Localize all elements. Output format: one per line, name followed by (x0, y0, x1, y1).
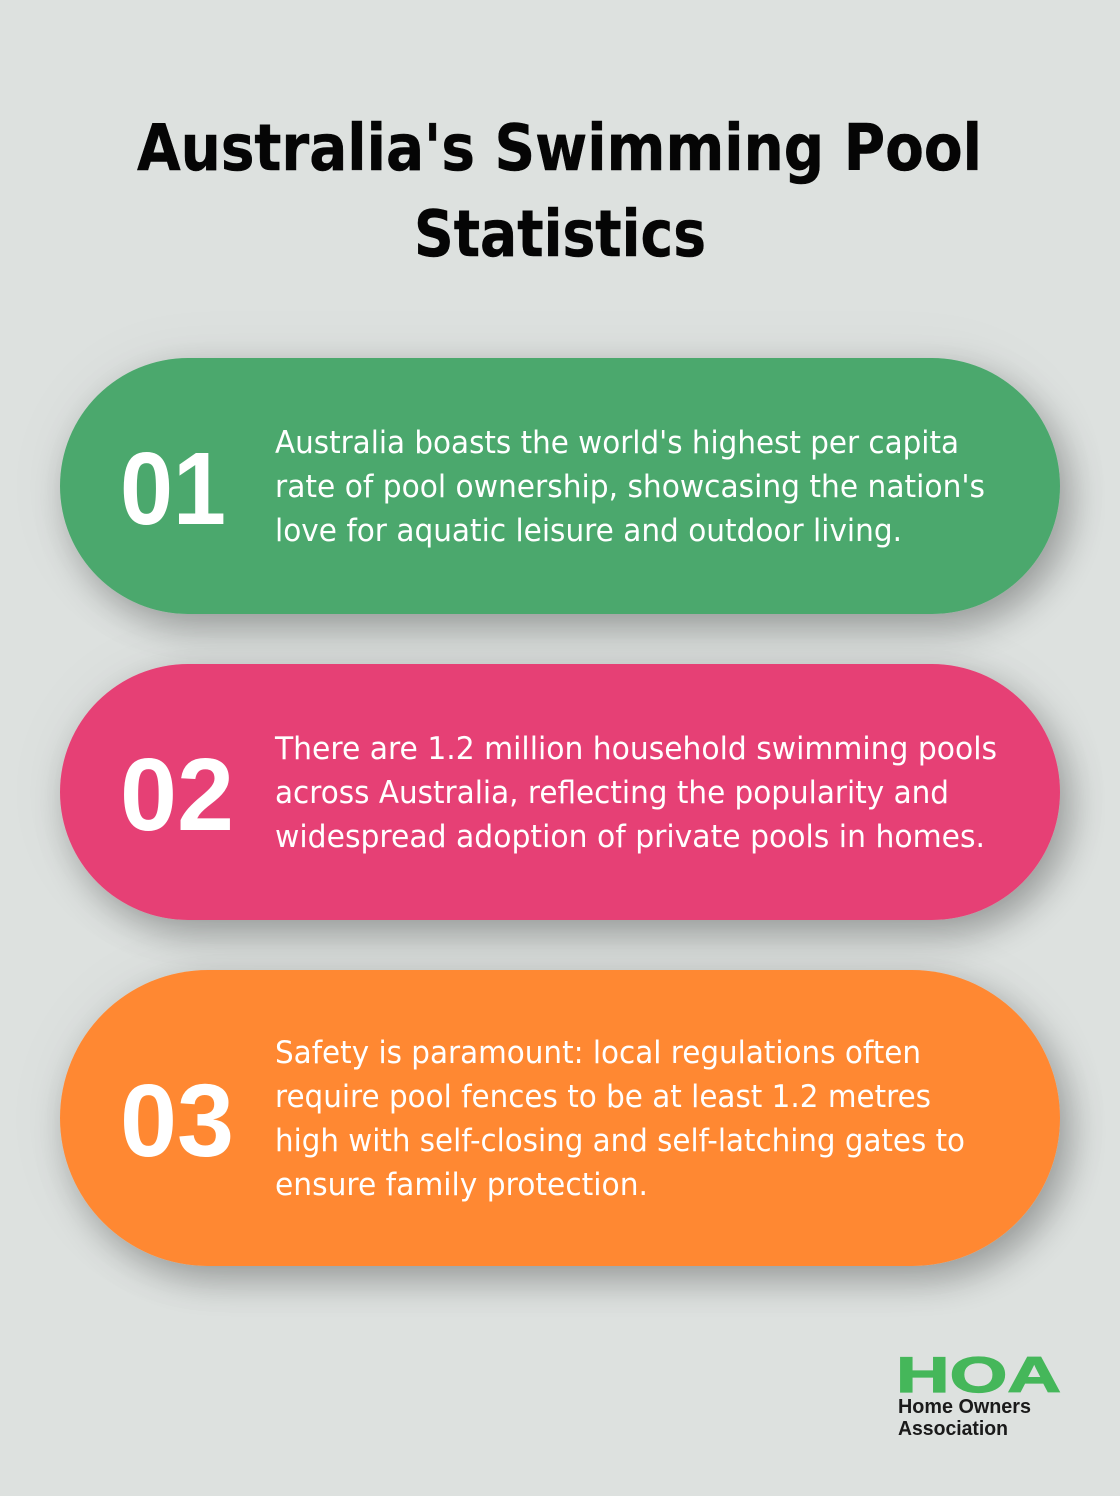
text block: pool ownership: rate of pool ownership, showcasing the nation's (275, 469, 985, 505)
text block: pool ownership: love for aquatic leisure and outdoor living. (275, 513, 902, 549)
text block: safety regulations: require pool fences to be at least 1.2 metres (275, 1079, 931, 1115)
text block: household pools (274, 731, 997, 855)
panel: statistic 03 (60, 970, 1060, 1266)
panel background: orange pill (60, 970, 1060, 1266)
text block: household pools: across Australia, reflecting the popularity and (275, 775, 949, 811)
text block: household pools: There are 1.2 million household swimming pools (274, 731, 997, 767)
number 02: 02 (120, 737, 234, 852)
logo: HOA Home Owners Association: Home Owners (898, 1396, 1031, 1418)
panel background: pink pill (60, 664, 1060, 920)
panel: statistic 02 (60, 664, 1060, 920)
text block: safety regulations: ensure family protection. (275, 1167, 648, 1203)
title: Australia's Swimming Pool (137, 112, 982, 186)
logo: HOA Home Owners Association: Association (898, 1418, 1008, 1440)
title: Statistics (414, 198, 706, 272)
number 01: 01 (120, 431, 226, 546)
logo: HOA Home Owners Association: HOA (896, 1347, 1061, 1403)
text block: safety regulations: high with self-closing and self-latching gates to (275, 1123, 965, 1159)
panel: statistic 01 (60, 358, 1060, 614)
text block: safety regulations (275, 1035, 965, 1203)
number 03: 03 (120, 1063, 234, 1178)
text block: household pools: widespread adoption of private pools in homes. (275, 819, 985, 855)
panel background: green pill (60, 358, 1060, 614)
text block: pool ownership: Australia boasts the world's highest per capita (275, 425, 959, 461)
logo: HOA Home Owners Association (896, 1347, 1061, 1440)
title (137, 112, 982, 272)
text block: pool ownership (275, 425, 985, 549)
text block: safety regulations: Safety is paramount: local regulations often (275, 1035, 921, 1071)
